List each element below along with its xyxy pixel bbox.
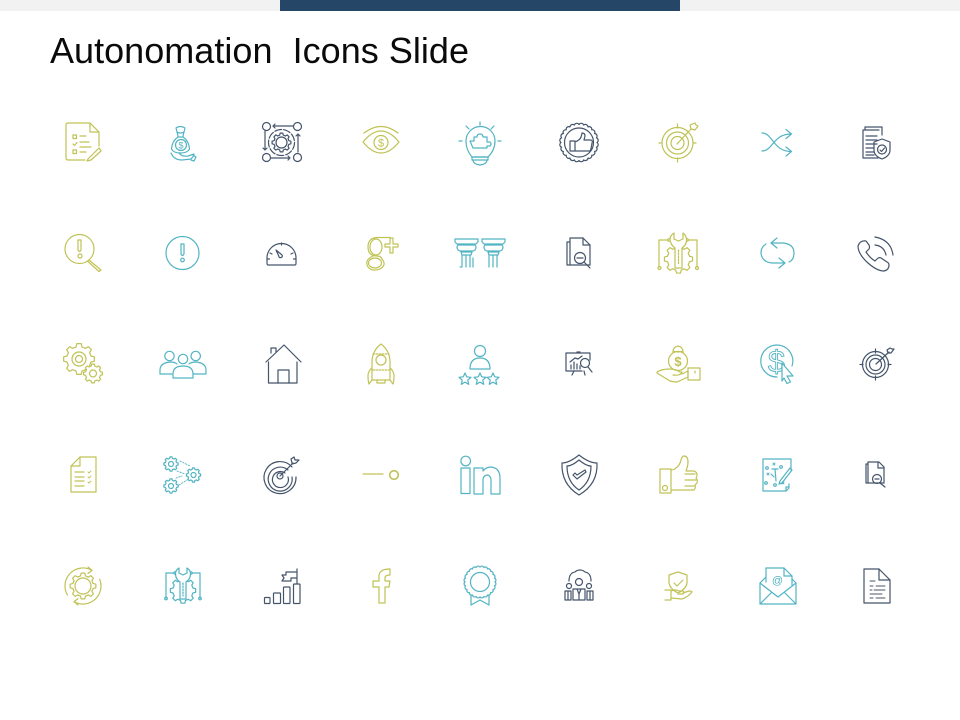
icon: document with shield [863, 127, 890, 159]
title: Autonomation Icons Slide [50, 30, 469, 71]
icon: phone ringing [858, 237, 893, 271]
icon: email envelope with at sign: @ [772, 575, 783, 587]
icon: gear and wrench with circuit lines [658, 233, 698, 273]
icon: group of people [160, 351, 206, 378]
icon: rocket [368, 344, 394, 384]
icon: line with circle [363, 471, 398, 479]
icon: form document [71, 457, 96, 492]
icon: process cycle with gear [262, 122, 302, 162]
icon: security shield with check [562, 455, 597, 495]
icon: search with exclamation [65, 234, 101, 272]
icon: team of three with gear arc [565, 570, 593, 600]
icon: eye with dollar [363, 126, 399, 153]
icon: money bag on hand [171, 126, 196, 161]
icon: award ribbon [464, 566, 496, 605]
icon: olive target with arrow [659, 123, 698, 162]
icon: document with magnifier [567, 238, 590, 268]
icon: facebook [373, 569, 390, 603]
icon: light bulb with puzzle [459, 122, 501, 165]
icon: dollar coin with cursor [761, 344, 793, 384]
icon: text document [864, 569, 890, 603]
icon: linkedin [461, 456, 500, 494]
icon: thumbs up [660, 456, 697, 493]
icon: navy target with arrow [860, 348, 894, 380]
icon: hand holding money bag [657, 346, 700, 382]
icon: google plus [367, 238, 398, 270]
icon: person with three stars [459, 346, 499, 384]
icon: presentation board with chart [566, 352, 592, 375]
icon: growth bars with flag [264, 569, 300, 604]
icon: speedometer gauge [267, 243, 296, 265]
icon: gear in rotation arrows [65, 567, 101, 605]
icon: shield on hand [665, 572, 692, 600]
icon: eye with dollar: $ [378, 138, 384, 150]
icon: money bag on hand: $ [178, 140, 184, 150]
icon: hand holding money bag: $ [674, 354, 682, 369]
icon: repeat arrows [761, 238, 794, 268]
icon: two gears [64, 344, 102, 383]
icon: checklist document with pencil [66, 123, 101, 161]
icon: thumbs up badge [560, 123, 598, 162]
icon: strategy plan with pen [763, 459, 792, 491]
icon: twin pillars [455, 239, 505, 267]
icon: small document with magnifier [866, 462, 885, 487]
icon: dollar coin with cursor: $ [768, 344, 785, 379]
icon: bullseye with arrow [264, 457, 299, 494]
icon: teal gear and wrench [165, 568, 201, 603]
icon: email envelope with at sign [760, 568, 796, 604]
icon: house [266, 345, 301, 383]
icon: exclamation circle [166, 236, 199, 270]
icon: connected gears [164, 457, 201, 493]
icon: shuffle arrows [762, 130, 792, 156]
top bar [0, 0, 960, 11]
